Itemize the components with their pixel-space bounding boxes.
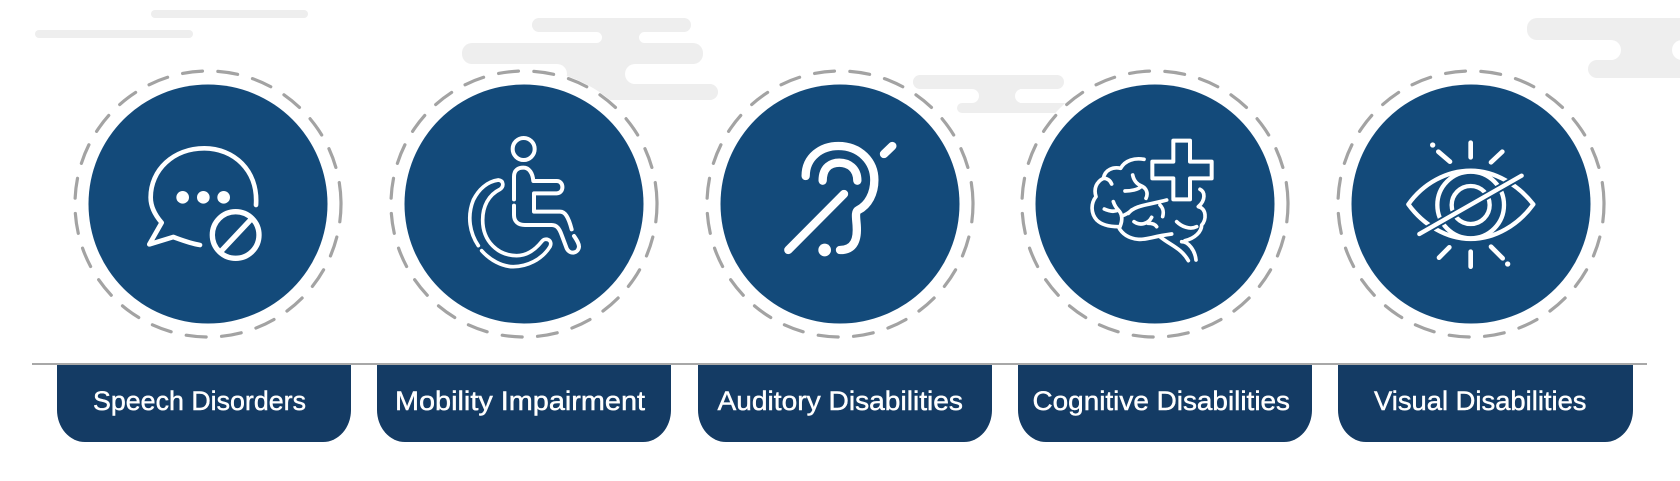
baseline rule bbox=[32, 363, 1647, 365]
icon: brain with plus bbox=[1092, 141, 1212, 261]
tab: cognitive disabilities bbox=[1018, 365, 1312, 442]
panel: visual disabilities bbox=[1336, 69, 1633, 442]
tab: cognitive disabilities: Cognitive Disabilities bbox=[1032, 386, 1290, 416]
background clouds bbox=[35, 10, 1680, 113]
icon: crossed-out eye bbox=[1408, 142, 1533, 267]
panel: cognitive disabilities bbox=[1018, 69, 1312, 442]
tab: visual disabilities: Visual Disabilities bbox=[1374, 386, 1586, 416]
icon: wheelchair user bbox=[470, 138, 579, 267]
panel: mobility impairment bbox=[377, 69, 671, 442]
icon: speech bubble with prohibition sign bbox=[149, 148, 259, 258]
tab: mobility impairment bbox=[377, 365, 671, 442]
tab: auditory disabilities bbox=[698, 365, 992, 442]
panel: speech disorders bbox=[57, 69, 351, 442]
tab: speech disorders bbox=[57, 365, 351, 442]
tab: speech disorders: Speech Disorders bbox=[93, 386, 306, 416]
icon: ear with slash bbox=[788, 146, 892, 256]
tab: mobility impairment: Mobility Impairment bbox=[395, 386, 646, 416]
tab: auditory disabilities: Auditory Disabilities bbox=[718, 386, 963, 416]
tab: visual disabilities bbox=[1338, 365, 1633, 442]
panel: auditory disabilities bbox=[698, 69, 992, 442]
